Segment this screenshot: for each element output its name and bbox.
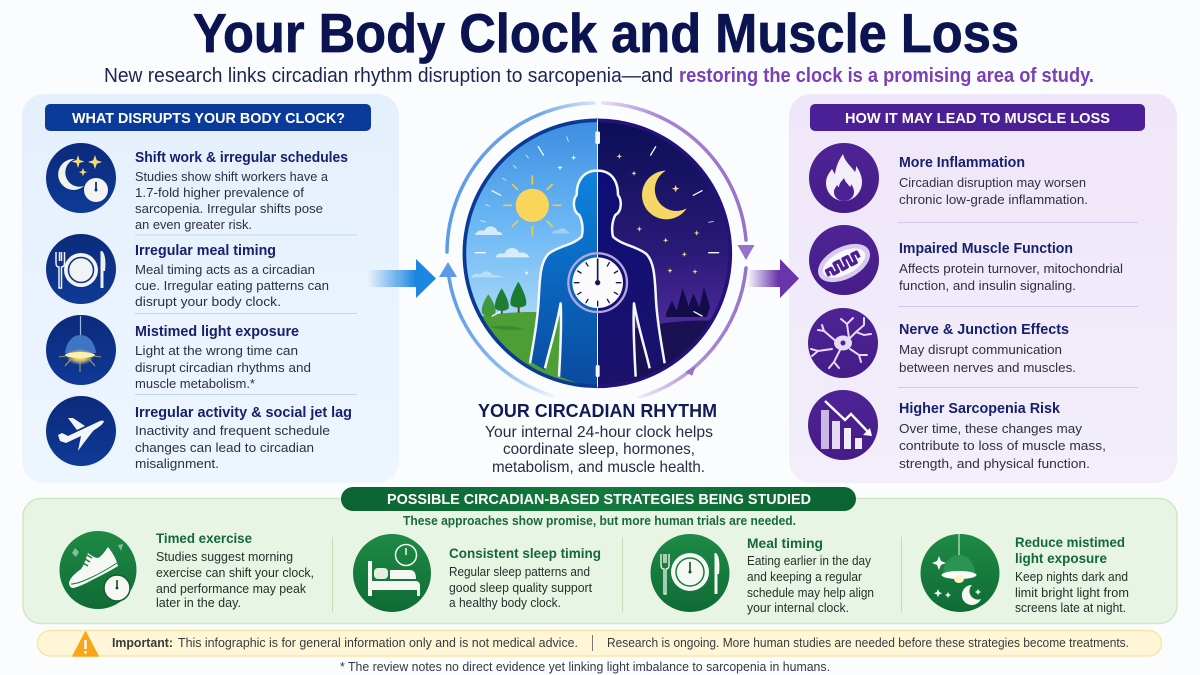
item: irregular activity and social jet lag: Irregular activity & social jet lag [135,405,352,421]
clouds [471,226,570,277]
icon: neuron [808,308,878,378]
day sky [466,122,597,316]
arrow: body clock to muscle effects [747,259,799,298]
item: irregular meal timing [46,234,329,309]
centre seam [595,119,600,387]
item: shift work: Shift work & irregular schedules [135,150,348,166]
item: more inflammation: chronic low-grade inflammation. [899,192,1088,207]
item: nerve and junction effects: between nerves and muscles. [899,360,1076,375]
item: impaired muscle function: function, and insulin signaling. [899,278,1076,293]
icon: falling bar chart [808,390,878,460]
strategy: reduce mistimed light exposure: light exposure [1015,550,1107,566]
circadian rhythm caption: Your internal 24-hour clock helps [485,424,713,441]
item: higher sarcopenia risk: Higher Sarcopenia Risk [899,401,1061,417]
item: irregular meal timing: disrupt your body clock. [135,294,281,309]
callout: medical disclaimer [38,630,1162,656]
item: shift work [46,143,348,232]
arrow: disruptors to body clock [368,259,436,298]
night sky [598,122,728,329]
disc rim [464,120,597,386]
strategy: timed exercise: later in the day. [156,596,241,610]
day and night disc with body [460,117,735,390]
panel heading [810,104,1145,131]
icon: warning triangle [73,632,98,656]
strategy: meal timing: your internal clock. [747,601,849,615]
icon: flame [809,143,879,213]
item: shift work: an even greater risk. [135,217,252,232]
strategy: meal timing: schedule may help align [747,586,874,600]
strategy: meal timing [650,534,874,615]
callout: medical disclaimer: Research is ongoing. More human studies are needed before these strategies become treatments. [607,635,1129,650]
item: nerve and junction effects: Nerve & Junction Effects [899,322,1069,338]
icon: mitochondrion [809,225,879,295]
circadian rhythm caption [478,401,717,476]
strategy: reduce mistimed light exposure: limit bright light from [1015,586,1129,600]
item: higher sarcopenia risk [808,390,1106,471]
panel: what disrupts your body clock [22,94,399,483]
item: irregular activity and social jet lag [46,396,352,471]
subtitle: New research links circadian rhythm disruption to sarcopenia—and [104,65,673,87]
icon: plate and cutlery [46,234,116,304]
strategy: consistent sleep timing: Regular sleep patterns and [449,565,590,579]
strategy: reduce mistimed light exposure: Keep nights dark and [1015,570,1128,584]
clock face [568,253,627,312]
item: impaired muscle function: Impaired Muscle Function [899,241,1073,257]
body silhouette: night half [597,171,665,390]
icon: bed and clock [353,534,431,612]
item: mistimed light exposure [46,315,311,391]
icon: running shoe and clock [60,531,136,609]
item: irregular activity and social jet lag: Inactivity and frequent schedule [135,423,330,438]
circadian rhythm caption: coordinate sleep, hormones, [503,441,695,458]
strategy: meal timing: Eating earlier in the day [747,554,872,568]
item: higher sarcopenia risk: Over time, these changes may [899,421,1083,436]
title: Your Body Clock and Muscle Loss [193,2,1019,64]
item: shift work: sarcopenia. Irregular shifts pose [135,201,323,216]
item: more inflammation [809,143,1088,213]
strategy: timed exercise: exercise can shift your clock, [156,566,314,580]
item: more inflammation: More Inflammation [899,155,1025,171]
item: higher sarcopenia risk: strength, and physical function. [899,456,1090,471]
item: mistimed light exposure: disrupt circadian rhythms and [135,360,311,375]
panel heading: WHAT DISRUPTS YOUR BODY CLOCK? [72,110,345,127]
strategy: consistent sleep timing [353,534,601,612]
item: mistimed light exposure: muscle metabolism.* [135,376,255,391]
strategy: timed exercise [60,530,314,610]
item: nerve and junction effects: May disrupt communication [899,342,1062,357]
subtitle: restoring the clock is a promising area of study. [679,65,1094,87]
strategy: reduce mistimed light exposure: Reduce mistimed [1015,534,1125,550]
item: irregular meal timing: Meal timing acts as a circadian [135,262,315,277]
item: mistimed light exposure: Mistimed light exposure [135,324,299,340]
panel: how it may lead to muscle loss [789,94,1177,483]
item: mistimed light exposure: Light at the wrong time can [135,343,298,358]
footnote: * The review notes no direct evidence yet linking light imbalance to sarcopenia in humans. [340,660,830,674]
icon: moon and clock [46,143,116,213]
stars [616,153,700,274]
item: more inflammation: Circadian disruption may worsen [899,175,1086,190]
item: nerve and junction effects [808,308,1076,378]
strategy: timed exercise: and performance may peak [156,582,307,596]
dial ticks [475,137,719,316]
callout: medical disclaimer: This infographic is for general information only and is not medical advice. [178,635,578,650]
panel: circadian-based strategies [23,487,1177,624]
strategy: meal timing: and keeping a regular [747,570,862,584]
subtitle [104,65,1094,87]
strategy: reduce mistimed light exposure [920,534,1129,615]
strategy: timed exercise: Timed exercise [156,530,252,546]
left ground and trees [482,282,577,383]
strategy: consistent sleep timing: good sleep quality support [449,581,593,595]
callout: medical disclaimer: Important: [112,635,173,650]
body silhouette: day half [530,171,597,390]
strategy: reduce mistimed light exposure: screens late at night. [1015,601,1126,615]
item: irregular meal timing: cue. Irregular eating patterns can [135,278,329,293]
strategy: timed exercise: Studies suggest morning [156,550,293,564]
item: irregular meal timing: Irregular meal timing [135,243,276,259]
strategies heading pill [341,487,856,511]
item: impaired muscle function [809,225,1123,295]
icon: plate clock and cutlery [650,534,730,612]
sun [503,175,561,235]
right ground and trees [618,287,710,383]
strategies heading pill: POSSIBLE CIRCADIAN-BASED STRATEGIES BEING STUDIED [387,491,811,508]
strategies subtitle: These approaches show promise, but more human trials are needed. [403,513,796,528]
strategy: consistent sleep timing: Consistent sleep timing [449,545,601,561]
moon [642,171,687,219]
item: impaired muscle function: Affects protein turnover, mitochondrial [899,261,1123,276]
circadian clock illustration [439,103,754,397]
strategy: meal timing: Meal timing [747,535,823,551]
panel heading: HOW IT MAY LEAD TO MUSCLE LOSS [845,110,1110,127]
panel heading [45,104,371,131]
strategy: consistent sleep timing: a healthy body clock. [449,596,561,610]
icon: airplane [46,396,116,466]
item: higher sarcopenia risk: contribute to loss of muscle mass, [899,438,1106,453]
item: shift work: Studies show shift workers have a [135,169,329,184]
outer cycle ring [439,103,754,397]
icon: lamp moon and stars [920,534,1000,612]
item: shift work: 1.7-fold higher prevalence of [135,185,304,200]
icon: hanging lamp [46,315,116,385]
item: irregular activity and social jet lag: misalignment. [135,456,219,471]
body outline [530,171,665,377]
circadian rhythm caption: YOUR CIRCADIAN RHYTHM [478,401,717,421]
item: irregular activity and social jet lag: changes can lead to circadian [135,440,314,455]
circadian rhythm caption: metabolism, and muscle health. [492,459,705,476]
